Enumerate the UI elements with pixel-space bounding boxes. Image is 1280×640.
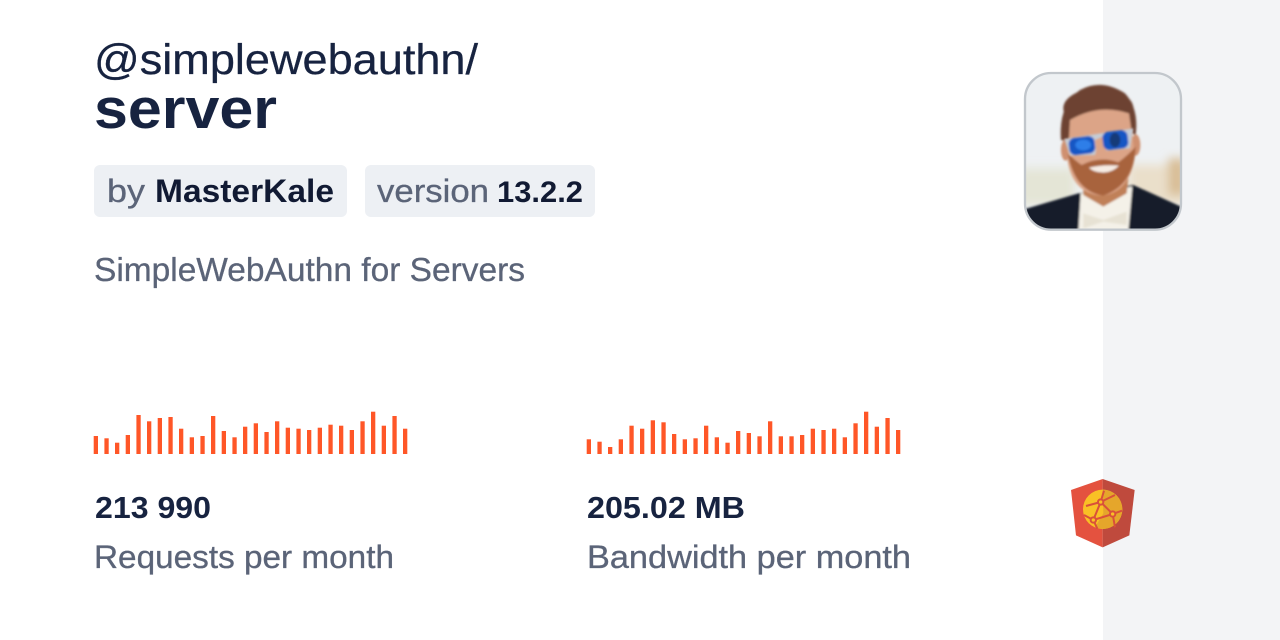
stat: bandwidth: 205.02 MB	[587, 490, 745, 525]
badge: version	[365, 165, 595, 217]
suit	[1025, 185, 1181, 232]
stat: bandwidth	[587, 490, 911, 575]
stat: requests: 213 990	[95, 490, 211, 525]
hair	[1061, 85, 1136, 142]
badge: version: 13.2.2	[497, 176, 583, 209]
title: package name	[94, 36, 478, 141]
badge: author: MasterKale	[155, 173, 334, 209]
bow tie	[1083, 212, 1127, 228]
ears	[1061, 139, 1070, 161]
sunglasses	[1064, 128, 1133, 157]
icon: red shield logo	[1071, 479, 1135, 547]
avatar photo	[1018, 73, 1188, 232]
stat: bandwidth: Bandwidth per month	[587, 539, 911, 575]
badge: version: version	[377, 173, 489, 209]
right side panel	[1103, 0, 1280, 640]
neck	[1083, 178, 1128, 207]
title: package name: server	[94, 77, 277, 141]
smile	[1089, 165, 1119, 172]
stat: requests: Requests per month	[94, 539, 394, 575]
face	[1068, 110, 1135, 196]
badge: author	[94, 165, 347, 217]
title: package name: @simplewebauthn/	[94, 36, 478, 84]
description: SimpleWebAuthn for Servers	[94, 251, 525, 288]
chart: bandwidth sparkline	[587, 412, 900, 454]
chart: requests sparkline	[94, 412, 407, 454]
shirt	[1078, 187, 1132, 232]
stat: requests	[94, 490, 394, 575]
badge: author: by	[107, 173, 145, 209]
beard	[1068, 147, 1136, 196]
